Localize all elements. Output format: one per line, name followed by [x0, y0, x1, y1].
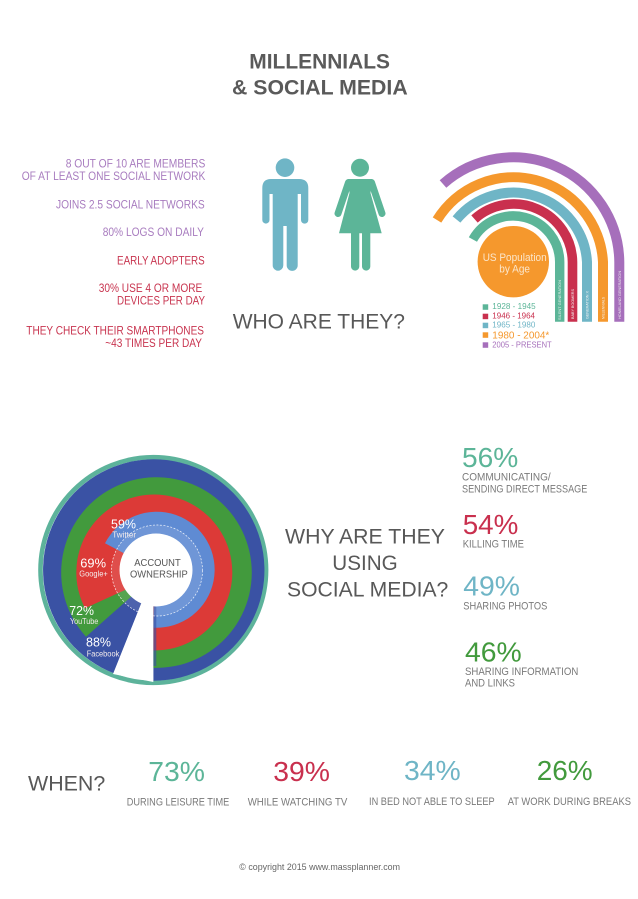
- text block: who they are facts: EARLY ADOPTERS: [117, 255, 205, 267]
- heading: when: WHEN?: [28, 770, 105, 795]
- stat: 26% at work: [508, 755, 631, 808]
- orange circle label: US Population: [483, 252, 547, 264]
- stat: 39% watching tv: 39%: [273, 756, 330, 787]
- stat: 34% in bed: [369, 755, 495, 808]
- stat: 46% sharing information: [465, 637, 578, 690]
- orange circle label: by Age: [499, 263, 530, 275]
- stat: 73% leisure time: DURING LEISURE TIME: [127, 797, 229, 809]
- stat: 54% killing time: [463, 509, 524, 551]
- stat: 39% watching tv: WHILE WATCHING TV: [248, 797, 348, 809]
- arch: silent generation: [473, 216, 562, 322]
- label: google plus: [79, 556, 108, 579]
- stat: 34% in bed: 34%: [404, 755, 461, 786]
- heading: why are they using social media: [285, 523, 448, 602]
- arch: homeland generation: HOMELAND GENERATION: [617, 271, 622, 319]
- text block: who they are facts: [22, 159, 206, 350]
- icon: woman: [338, 159, 382, 271]
- text block: who they are facts: THEY CHECK THEIR SMARTPHONES: [26, 325, 204, 337]
- text block: who they are facts: 8 OUT OF 10 ARE MEMBERS: [66, 159, 206, 171]
- center label: OWNERSHIP: [130, 569, 188, 580]
- stat: 34% in bed: IN BED NOT ABLE TO SLEEP: [369, 796, 495, 808]
- label: facebook: 88%: [86, 635, 111, 650]
- stat: 49% sharing photos: SHARING PHOTOS: [463, 600, 547, 612]
- center label: [130, 558, 188, 580]
- arch: millennials: MILLENNIALS: [600, 297, 606, 319]
- label: youtube: [69, 603, 99, 626]
- legend: 1980 - 2004*: [492, 329, 549, 341]
- label: google plus: 69%: [80, 556, 106, 571]
- stat: 39% watching tv: [248, 756, 348, 809]
- stat: 56% communicating: SENDING DIRECT MESSAGE: [462, 483, 587, 495]
- label: youtube: YouTube: [70, 616, 99, 626]
- legend: 1928 - 1945: [492, 301, 536, 311]
- legend: 1965 - 1980: [492, 320, 536, 330]
- arch: baby boomers: BABY BOOMERS: [570, 289, 575, 319]
- arch: silent generation: SILENT GENERATION: [557, 280, 562, 320]
- stat: 56% communicating: 56%: [462, 442, 518, 473]
- heading: who are they: WHO ARE THEY?: [233, 309, 405, 334]
- heading: why are they using social media: WHY ARE THEY: [285, 523, 445, 548]
- stat: 54% killing time: 54%: [463, 509, 518, 540]
- label: twitter: Twitter: [112, 529, 136, 539]
- stat: 56% communicating: [462, 442, 587, 495]
- stat: 54% killing time: KILLING TIME: [463, 539, 524, 551]
- text block: who they are facts: JOINS 2.5 SOCIAL NETWORKS: [56, 199, 205, 211]
- arch: generation X: GENERATION X: [584, 291, 590, 319]
- label: facebook: [86, 635, 120, 659]
- footer copyright: © copyright 2015 www.massplanner.com: [239, 862, 400, 873]
- arch: generation X: [456, 193, 590, 322]
- stat: 26% at work: 26%: [537, 755, 593, 786]
- legend: 1946 - 1964: [492, 310, 535, 320]
- text block: who they are facts: ~43 TIMES PER DAY: [105, 338, 202, 350]
- text block: who they are facts: 80% LOGS ON DAILY: [103, 227, 204, 239]
- label: youtube: 72%: [69, 603, 94, 618]
- text block: who they are facts: 30% USE 4 OR MORE: [99, 283, 203, 295]
- stat: 46% sharing information: AND LINKS: [465, 678, 515, 690]
- legend: 2005 - PRESENT: [492, 339, 552, 349]
- stat: 49% sharing photos: 49%: [463, 571, 520, 602]
- title: [232, 49, 408, 99]
- chart: US population by age arches: [437, 157, 622, 349]
- stat: 46% sharing information: 46%: [465, 637, 522, 668]
- orange circle label: [478, 226, 549, 297]
- stat: 73% leisure time: [127, 756, 229, 809]
- label: google plus: Google+: [79, 569, 108, 579]
- stat: 73% leisure time: 73%: [148, 756, 205, 787]
- heading: why are they using social media: USING: [332, 550, 398, 575]
- heading: why are they using social media: SOCIAL MEDIA?: [287, 577, 448, 602]
- stat: 46% sharing information: SHARING INFORMATION: [465, 666, 578, 678]
- label: twitter: 59%: [111, 516, 136, 531]
- title: MILLENNIALS: [249, 49, 390, 73]
- label: facebook: Facebook: [87, 649, 120, 659]
- title: & SOCIAL MEDIA: [232, 75, 408, 99]
- arch: homeland generation: [443, 157, 622, 322]
- stat: 49% sharing photos: [463, 571, 547, 612]
- text block: who they are facts: DEVICES PER DAY: [117, 296, 205, 308]
- text block: who they are facts: OF AT LEAST ONE SOCIAL NETWORK: [22, 171, 206, 183]
- arch: millennials: [437, 177, 606, 322]
- legend: [483, 301, 552, 349]
- arch: baby boomers: [474, 204, 575, 322]
- stat: 56% communicating: COMMUNICATING/: [462, 472, 551, 484]
- center label: ACCOUNT: [134, 558, 181, 569]
- chart: account ownership donut: [40, 457, 266, 683]
- icon: man: [262, 158, 308, 271]
- label: twitter: [111, 516, 136, 539]
